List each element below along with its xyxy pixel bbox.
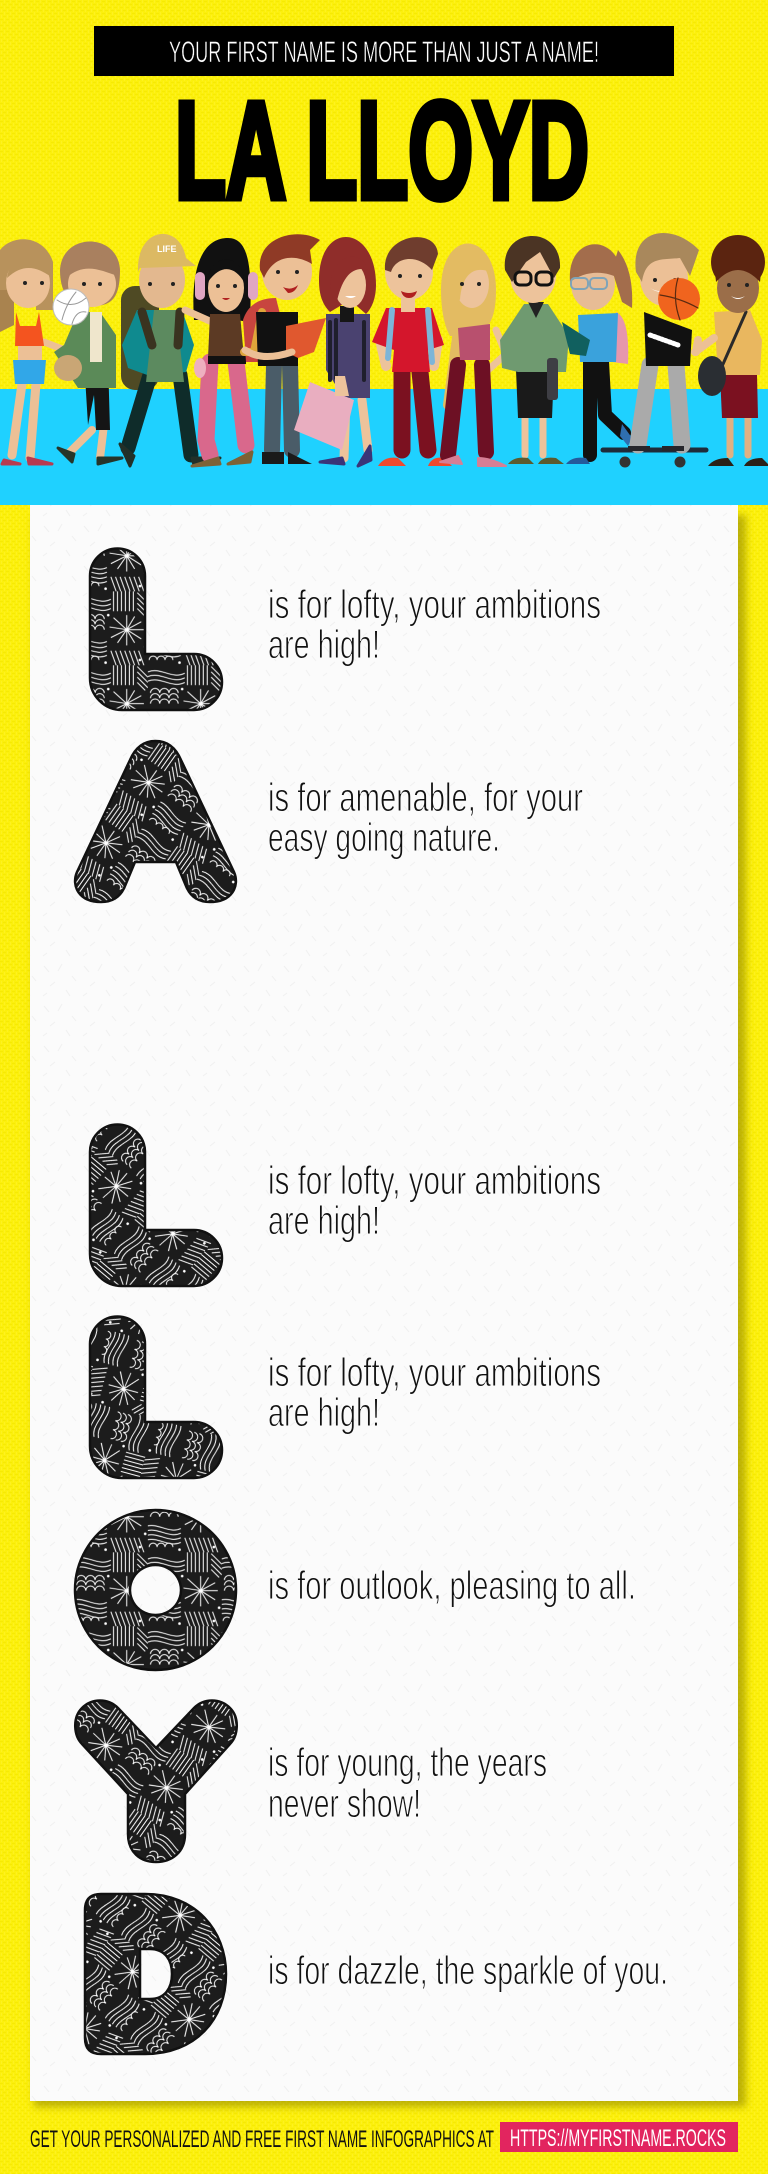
icon: decorated letter Y [75,1700,237,1862]
text: lofty: is for lofty, your ambitions [268,1351,601,1395]
person 3: boy with backpack and cap: LIFE [157,244,176,254]
row: second L for lofty [90,1125,601,1286]
text: lofty: is for lofty, your ambitions [268,583,601,627]
person 6: girl with red hair and pink bag [294,237,376,466]
person 11: skateboarder with basketball [603,233,706,468]
header banner [94,26,674,76]
person 1: girl in orange top [0,239,70,464]
text: lofty: are high! [268,623,380,667]
icon: decorated letter O [75,1510,236,1670]
row: L for lofty [90,549,601,710]
content card [30,505,738,2101]
text: lofty [268,583,601,667]
text: lofty [268,1351,601,1435]
card shadow [34,515,746,2107]
icon: decorated letter L [90,1317,222,1478]
person 9: boy with glasses in green sweater [500,236,569,464]
text: outlook: is for outlook, pleasing to all. [268,1564,636,1608]
person 2: girl with volleyball [53,242,122,464]
person 8: blonde girl [440,243,506,466]
person 5: boy with open book [243,234,326,464]
icon: decorated letter L [90,1125,222,1286]
row: D for dazzle [85,1894,668,2054]
text: amenable: easy going nature. [268,816,500,860]
text: lofty: are high! [268,1199,380,1243]
row: A for amenable [75,741,583,902]
row: third L for lofty [90,1317,601,1478]
icon: decorated letter A [75,741,236,902]
person 12: boy with afro and tank top [695,235,768,466]
illustration: group of twelve students [0,233,768,468]
text: lofty: is for lofty, your ambitions [268,1159,601,1203]
text: young: never show! [268,1782,421,1826]
person 3: boy with backpack and cap [120,234,220,466]
text: lofty: are high! [268,1391,380,1435]
text: lofty [268,1159,601,1243]
person 7: boy in red shirt [372,237,452,466]
icon: decorated letter D [85,1894,226,2054]
icon: decorated letter L [90,549,222,710]
row: O for outlook [75,1510,636,1670]
person 4: girl with headphones [185,238,258,466]
text: young [268,1741,547,1826]
text: young: is for young, the years [268,1741,547,1785]
person 10: girl with glasses and ponytail [562,244,632,464]
floor band [0,389,768,505]
text: amenable [268,776,583,860]
text: amenable: is for amenable, for your [268,776,583,820]
row: Y for young [75,1700,547,1862]
